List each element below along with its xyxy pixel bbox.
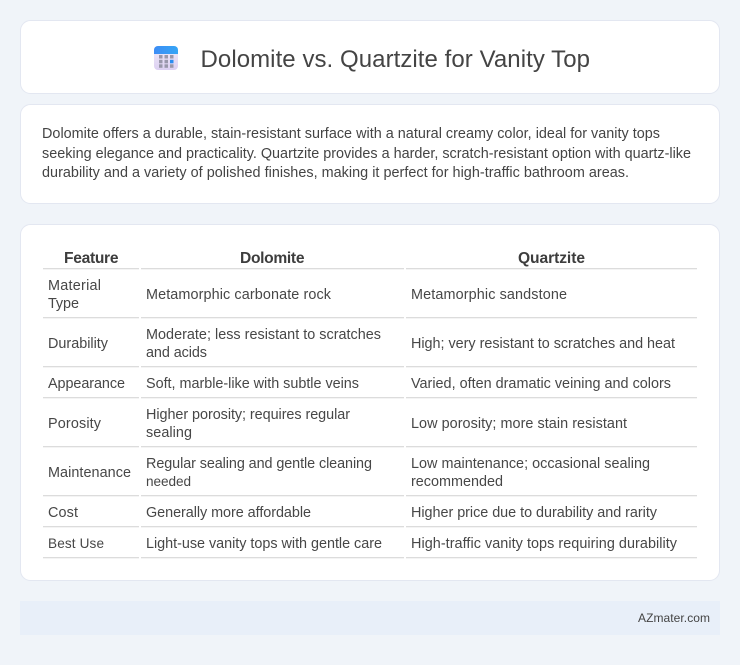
table header: Feature bbox=[64, 250, 119, 267]
row: appearance: Soft, marble-like with subtle veins bbox=[146, 376, 359, 392]
row: maintenance: needed bbox=[146, 474, 191, 489]
row: appearance bbox=[48, 376, 671, 392]
row: best use: Best Use bbox=[48, 536, 104, 551]
row: material type: Metamorphic sandstone bbox=[411, 287, 567, 303]
table header: Quartzite bbox=[518, 250, 585, 267]
panel: title card bbox=[20, 20, 720, 94]
row: maintenance bbox=[48, 456, 650, 490]
row: cost bbox=[48, 505, 658, 521]
intro paragraph: Dolomite offers a durable, stain-resistant surface with a natural creamy color, ideal for vanity tops bbox=[42, 126, 660, 142]
table header bbox=[64, 250, 585, 267]
footer bbox=[20, 601, 720, 635]
row: material type: Type bbox=[48, 296, 79, 312]
row: porosity: sealing bbox=[146, 425, 192, 441]
row: material type: Metamorphic carbonate rock bbox=[146, 287, 332, 303]
row: cost: Cost bbox=[48, 505, 78, 521]
row: material type: Material bbox=[48, 278, 101, 294]
table header: Dolomite bbox=[240, 250, 305, 267]
row: maintenance: recommended bbox=[411, 474, 503, 490]
row: maintenance: Maintenance bbox=[48, 465, 131, 481]
panel: comparison table card bbox=[20, 224, 720, 580]
intro paragraph: durability and a variety of polished finishes, making it perfect for high-traffic bathroom areas. bbox=[42, 165, 629, 181]
row: cost: Higher price due to durability and rarity bbox=[411, 505, 658, 521]
intro paragraph bbox=[42, 126, 691, 181]
row: material type bbox=[48, 278, 567, 312]
footer credit: AZmater.com bbox=[638, 611, 710, 625]
row: best use bbox=[48, 536, 678, 552]
row: best use: Light-use vanity tops with gentle care bbox=[146, 536, 382, 552]
row: maintenance: Low maintenance; occasional sealing bbox=[411, 456, 650, 472]
row: durability: Durability bbox=[48, 336, 109, 352]
row: durability: Moderate; less resistant to scratches bbox=[146, 327, 381, 343]
panel: intro text card bbox=[20, 104, 720, 204]
row: porosity bbox=[48, 407, 627, 441]
intro paragraph: seeking elegance and practicality. Quartzite provides a harder, scratch-resistant option with quartz-like bbox=[42, 146, 691, 162]
row: porosity: Low porosity; more stain resistant bbox=[411, 416, 627, 432]
row: porosity: Higher porosity; requires regular bbox=[146, 407, 350, 423]
icon: calendar bbox=[154, 46, 178, 70]
title: Dolomite vs. Quartzite for Vanity Top bbox=[200, 46, 590, 73]
row: durability: High; very resistant to scratches and heat bbox=[411, 336, 675, 352]
row: durability: and acids bbox=[146, 345, 207, 361]
row: durability bbox=[48, 327, 675, 361]
row: appearance: Appearance bbox=[48, 376, 125, 392]
row: cost: Generally more affordable bbox=[146, 505, 311, 521]
row: maintenance: Regular sealing and gentle cleaning bbox=[146, 456, 372, 472]
row: best use: High-traffic vanity tops requiring durability bbox=[411, 536, 678, 552]
row: appearance: Varied, often dramatic veining and colors bbox=[411, 376, 671, 392]
row: porosity: Porosity bbox=[48, 416, 102, 432]
